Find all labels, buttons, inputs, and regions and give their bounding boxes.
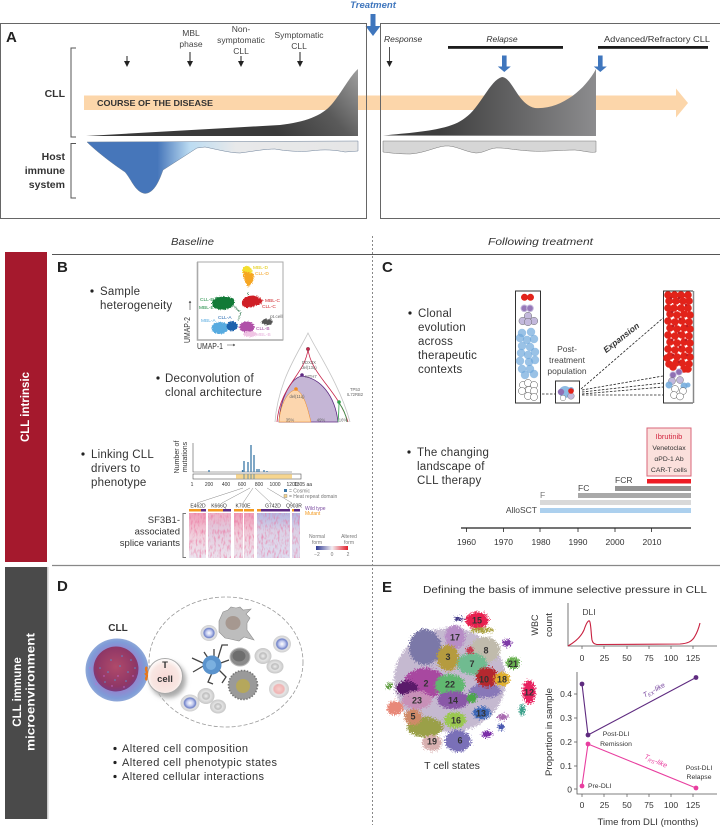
macrophage (219, 607, 254, 641)
panel A: after treatment (380, 24, 720, 218)
timepoint labels: Post-DLI (603, 731, 629, 738)
UMAP plot: MBL-D (253, 265, 268, 271)
therapy timeline bars: AlloSCT (506, 505, 537, 515)
therapy timeline bars: FC (578, 483, 589, 493)
heatmap colour scale: 0 (331, 552, 334, 558)
mutation bar chart: 1200 (286, 482, 298, 488)
post-treatment population box (556, 381, 580, 403)
timeline axis: 1990 (569, 537, 588, 547)
bullet: changing landscape (407, 447, 489, 487)
timeline axis: 2000 (606, 537, 625, 547)
clonal fish plot: del(13q) (301, 365, 317, 370)
UMAP plot: MBL-C (265, 298, 280, 304)
course of the disease label: COURSE OF THE DISEASE (97, 98, 213, 108)
UMAP plot: pt.cell (270, 314, 283, 320)
novel therapy box (647, 428, 691, 476)
mutation bar chart: 1 (191, 482, 194, 488)
wild type and mutant legend (305, 506, 326, 517)
immune system after treatment (383, 141, 596, 154)
bullet: clonal evolution: evolution (418, 322, 466, 334)
dark grey cell (230, 648, 250, 666)
CLL burden curve (86, 69, 358, 136)
relapse label and bar: Relapse (486, 34, 518, 44)
immune system curve (87, 141, 358, 194)
bullet: sample heterogeneity (90, 286, 172, 312)
host immune system bracket and label: Host (42, 151, 65, 163)
mutation bar chart: Number of (174, 441, 181, 473)
panel letter C: C (382, 259, 393, 276)
panel E title: Defining the basis of immune selective pressure in CLL (423, 584, 707, 596)
wild type and mutant legend: Mutant (305, 511, 321, 517)
exhausted-like T cell series: T (642, 691, 649, 699)
panel B (57, 259, 364, 558)
tSNE cluster map (386, 612, 536, 752)
WBC count chart: 0 (580, 653, 585, 663)
stage labels: Non- (232, 24, 250, 34)
UMAP plot: CLL-C (262, 304, 276, 310)
timepoint labels: Remission (600, 741, 632, 748)
tSNE cluster map: 21 (508, 659, 518, 669)
proportion line chart: 75 (644, 800, 654, 810)
bullet: linking drivers: Linking CLL (91, 449, 154, 461)
clonal fish plot: 16% (339, 418, 347, 422)
bullet: clonal evolution: across (418, 336, 453, 348)
CLL bracket and label (45, 48, 76, 137)
mutation bar chart: 600 (238, 482, 246, 488)
WBC count chart: 25 (600, 653, 609, 663)
proportion line chart: 100 (664, 800, 678, 810)
WBC count chart (530, 603, 717, 663)
novel therapy box: Ibrutinib (656, 432, 682, 441)
sidebar: CLL immune microenvironment: microenvironment (26, 633, 38, 751)
bullet: clonal evolution: contexts (418, 364, 462, 376)
CLL cell (86, 638, 148, 702)
clonal fish plot: del(11q) (289, 394, 305, 399)
bar chart legend: = Heat repeat domain (289, 494, 337, 500)
novel therapy box: Venetoclax (652, 445, 686, 452)
tSNE cluster map: 16 (451, 716, 461, 726)
heatmaps: K666Q (211, 504, 227, 510)
advanced refractory label and bar (598, 34, 710, 49)
tSNE cluster map: 6 (457, 736, 463, 746)
stage arrows (127, 52, 300, 64)
relapse label and bar (448, 34, 563, 49)
stage labels (179, 24, 324, 56)
sidebar: CLL intrinsic (5, 252, 47, 562)
UMAP plot (183, 262, 283, 351)
bullet: sample heterogeneity: heterogeneity (100, 300, 172, 312)
bullet: changing landscape: The changing (417, 447, 489, 459)
mutation bar chart (174, 441, 312, 488)
panel letter B: B (57, 259, 68, 276)
SF3B1 label: SF3B1- (148, 515, 180, 526)
proportion line chart: 0 (567, 784, 572, 794)
SF3B1 label: splice variants (120, 538, 180, 549)
bullet: clonal evolution: therapeutic (418, 350, 477, 362)
WBC count chart: WBC (530, 614, 541, 636)
bar chart legend (284, 488, 337, 500)
bullet: deconvolution: Deconvolution of (165, 373, 254, 385)
tSNE cluster map: 18 (497, 674, 507, 684)
bullet: deconvolution (156, 373, 262, 399)
heatmaps: E462D (190, 504, 206, 510)
heatmaps: Q903R (286, 504, 302, 510)
timeline axis: 1960 (457, 537, 476, 547)
sidebar: CLL intrinsic: CLL intrinsic (20, 371, 32, 442)
advanced refractory label and bar: Advanced/Refractory CLL (604, 34, 710, 44)
expansion dashed lines (542, 318, 663, 395)
bullet: clonal evolution: Clonal (418, 308, 452, 320)
clonal fish plot: MTH7 (305, 374, 317, 379)
heatmaps: G742D (265, 504, 281, 510)
arrow: relapse treatment (498, 56, 511, 72)
tSNE cluster map: 14 (448, 696, 458, 706)
post-treatment expanded clone column (664, 291, 694, 403)
proportion line chart: Proportion in sample (544, 688, 555, 776)
stage labels: phase (179, 39, 203, 49)
WBC count chart: 50 (622, 653, 632, 663)
clonal fish plot: 35% (286, 418, 294, 422)
SF3B1 label: associated (135, 526, 180, 538)
dashed microenvironment ellipse (149, 597, 303, 727)
UMAP plot: UMAP-1 (197, 342, 223, 351)
tSNE cluster map: 2 (423, 678, 429, 688)
timepoint labels: Pre-DLI (588, 783, 612, 790)
bullet: deconvolution: clonal architecture (165, 387, 262, 399)
mutation bar chart: 200 (205, 482, 213, 488)
stage labels: Symptomatic (274, 30, 324, 40)
tSNE cluster map: 23 (412, 696, 422, 706)
proportion line chart: 0 (580, 800, 585, 810)
bullet: sample heterogeneity: Sample (100, 286, 140, 298)
post-treatment population label: Post- (557, 344, 577, 354)
timepoint labels (588, 731, 712, 790)
post-treatment population label: treatment (549, 355, 586, 365)
bullet: linking drivers: drivers to (91, 463, 140, 475)
post-treatment population label: population (547, 366, 587, 376)
tSNE cluster map: 12 (524, 688, 534, 698)
CLL cell label: CLL (108, 623, 128, 634)
tSNE cluster map: 10 (479, 674, 489, 684)
timepoint labels: Relapse (687, 774, 712, 781)
T cell: T (162, 660, 168, 671)
exhausted-like T cell series: EX (647, 690, 656, 699)
host immune system bracket and label: system (29, 179, 65, 191)
WBC count chart: 125 (686, 653, 700, 663)
expansion label: Expansion (601, 320, 641, 355)
UMAP axis labels: UMAP-2 (183, 317, 192, 343)
bullets: altered features: Altered cell phenotypic states (122, 757, 278, 769)
pink cell (269, 680, 289, 698)
regulatory-like T cell series: RS (646, 758, 656, 766)
clonal fish plot: TP53 (350, 387, 361, 392)
proportion line chart: 0.2 (560, 737, 572, 747)
heatmaps (189, 504, 302, 558)
WBC count chart: count (544, 613, 555, 637)
proportion line chart: 125 (686, 800, 700, 810)
novel therapy box: αPD-1 Ab (654, 456, 684, 463)
heatmap colour scale (309, 534, 357, 558)
stage labels: MBL (182, 28, 200, 38)
bullet: linking drivers (81, 449, 154, 489)
clonal fish plot: IL72RB2 (347, 392, 364, 397)
heatmap colour scale: Altered (341, 534, 357, 540)
stage labels: symptomatic (217, 35, 266, 45)
T cell (148, 658, 186, 698)
SF3B1 label (120, 514, 186, 558)
proportion line chart: 0.4 (560, 689, 572, 699)
mutation bar chart: 1305 aa (294, 482, 312, 488)
tSNE cluster map: 15 (472, 616, 482, 626)
pre-treatment clone column (516, 291, 540, 403)
panel E (382, 579, 717, 828)
bullet: changing landscape: landscape of (417, 461, 485, 473)
bullets: altered features (113, 743, 278, 783)
tSNE cluster map: 13 (476, 708, 486, 718)
clonal fish plot: DDX3X (302, 360, 316, 365)
arrow: treatment (366, 14, 380, 36)
tSNE cluster map: 5 (410, 712, 416, 722)
heatmap colour scale: −2 (314, 552, 320, 558)
heatmap colour scale: 2 (347, 552, 350, 558)
timepoint labels: Post-DLI (686, 765, 712, 772)
bar chart legend: = Cosmic (289, 488, 310, 494)
novel therapy box: CAR-T cells (651, 467, 688, 474)
UMAP plot: CLL-D (255, 271, 269, 277)
T cell: cell (157, 674, 173, 685)
course of the disease arrow (84, 88, 688, 118)
heatmap colour scale: form (312, 540, 322, 546)
tSNE cluster map: 7 (469, 659, 475, 669)
light blue-nucleus cells (180, 625, 291, 712)
therapy timeline bars: FCR (615, 475, 632, 485)
post-treatment population label (547, 344, 587, 376)
host immune system bracket and label: immune (25, 165, 65, 177)
exhausted-like T cell series (580, 675, 698, 737)
bullet: clonal evolution (408, 308, 477, 376)
synapse connector (146, 667, 147, 680)
UMAP plot: CLL-E (200, 297, 214, 303)
timeline axis: 2010 (643, 537, 662, 547)
bullets: altered features: Altered cell composition (122, 743, 248, 755)
sidebar: CLL immune microenvironment (5, 567, 48, 819)
connector lines to heatmaps (197, 488, 292, 503)
clonal fish plot: 49% (317, 418, 325, 422)
light grey cells (198, 648, 284, 714)
stage labels: CLL (291, 41, 307, 51)
timeline axis: 1970 (494, 537, 513, 547)
heatmap colour scale: Normal (309, 534, 325, 540)
panel A: before treatment (0, 24, 366, 218)
therapy timeline bars: F (540, 490, 545, 500)
timeline axis (457, 528, 691, 547)
regulatory-like T cell series (580, 742, 698, 790)
timeline axis: 1980 (532, 537, 551, 547)
heatmap colour scale: form (344, 540, 354, 546)
host immune system bracket and label (25, 144, 76, 198)
tSNE caption: T cell states (424, 760, 480, 772)
tSNE cluster map: 22 (445, 680, 455, 690)
mutation bar chart: 1000 (269, 482, 281, 488)
arrow: response (388, 47, 390, 64)
bullet: linking drivers: phenotype (91, 477, 147, 489)
therapy timeline bars (506, 475, 691, 515)
panel D (57, 578, 303, 783)
bullet: changing landscape: CLL therapy (417, 475, 481, 487)
exhausted-like T cell series: -like (652, 682, 667, 694)
UMAP plot: CLL-B (256, 326, 270, 332)
UMAP plot: MBL-E (199, 305, 214, 311)
clonal fish plot (275, 333, 364, 422)
CLL bracket and label: CLL (45, 88, 66, 100)
arrow: refractory treatment (594, 56, 607, 72)
bullets: altered features: Altered cellular interactions (122, 771, 264, 783)
proportion line chart: 0.1 (560, 761, 572, 771)
column heading: baseline: Baseline (171, 236, 214, 248)
response label: Response (384, 34, 423, 44)
mutation bar chart: 800 (255, 482, 263, 488)
regulatory-like T cell series: T (643, 754, 650, 762)
stage labels: CLL (233, 46, 249, 56)
proportion line chart: 0.3 (560, 713, 572, 723)
mutation bar chart: mutations (182, 441, 189, 472)
panel letter A: A (6, 29, 17, 46)
panel letter D: D (57, 578, 68, 595)
UMAP plot: MBL-B (256, 332, 271, 338)
tSNE cluster map: 17 (450, 632, 460, 642)
relapse tumour curve (383, 69, 596, 136)
wild type and mutant legend: Wild type (305, 506, 326, 512)
treatment label: Treatment (350, 0, 397, 11)
proportion line chart (544, 672, 717, 828)
UMAP plot: MBL-A (201, 318, 216, 324)
heatmaps: K700E (235, 504, 251, 510)
WBC count chart: 100 (664, 653, 678, 663)
UMAP plot: CLL-A (218, 315, 232, 321)
regulatory-like T cell series: -like (653, 758, 668, 770)
proportion line chart: 25 (600, 800, 609, 810)
sidebar: CLL immune microenvironment: CLL immune (12, 657, 24, 727)
WBC count chart: DLI (582, 607, 596, 617)
WBC count chart: 75 (644, 653, 654, 663)
tSNE cluster map: 8 (483, 646, 489, 656)
mutation bar chart: 400 (222, 482, 230, 488)
panel C (382, 259, 694, 547)
tSNE cluster map: 3 (445, 652, 451, 662)
proportion line chart: Time from DLI (months) (598, 817, 698, 828)
column heading: following treatment: Following treatment (488, 236, 594, 248)
proportion line chart: 50 (622, 800, 632, 810)
tSNE cluster map: 19 (427, 736, 437, 746)
dendritic cell (192, 645, 229, 684)
olive nucleus cell (228, 670, 258, 700)
panel letter E: E (382, 579, 392, 596)
